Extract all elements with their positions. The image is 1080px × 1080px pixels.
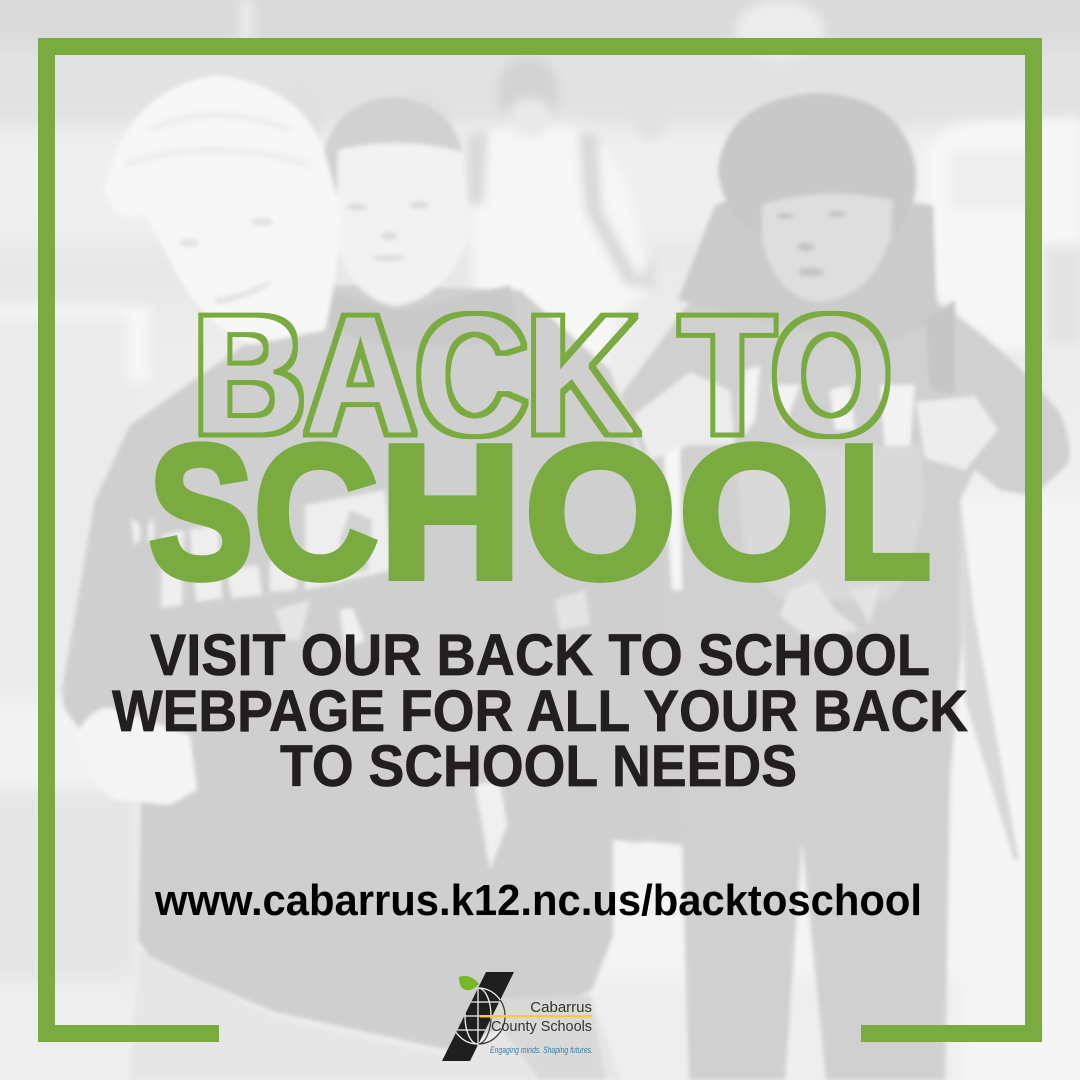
right boy hand lower	[613, 840, 682, 930]
heading: SCHOOL: O	[524, 406, 676, 618]
logo name: Cabarrus	[530, 999, 592, 1016]
icon: green leaf	[459, 976, 479, 990]
message text: WEBPAGE FOR ALL YOUR BACK	[112, 679, 968, 744]
logo: Cabarrus County Schools	[442, 972, 593, 1061]
right boy hair	[718, 93, 916, 235]
right boy hands	[634, 372, 735, 460]
message text: VISIT OUR BACK TO SCHOOL	[150, 623, 930, 688]
thumbs up hand	[76, 708, 197, 805]
right boy face	[762, 194, 893, 302]
left boy head	[104, 75, 342, 345]
trees row	[275, 80, 325, 150]
background walker	[468, 126, 654, 380]
heading: SCHOOL: L	[838, 406, 932, 618]
shirt print right	[740, 366, 915, 450]
tagline: Engaging minds. Shaping futures.	[490, 1045, 593, 1055]
backpack strap	[960, 500, 1019, 860]
yellow rule	[480, 1015, 592, 1018]
gap and pants	[130, 950, 620, 1080]
heading: SCHOOL: O	[678, 406, 830, 618]
heading: SCHOOL: C	[254, 406, 378, 618]
hoodie string	[475, 780, 507, 870]
message text: TO SCHOOL NEEDS	[280, 734, 797, 799]
gap white between boys	[664, 445, 682, 590]
heading: SCHOOL: S	[148, 406, 254, 618]
car on right side	[925, 118, 1080, 350]
logo name second line: County Schools	[491, 1018, 592, 1035]
icon: black slanted bar with globe	[442, 972, 514, 1061]
middle boy hair	[323, 97, 463, 227]
heading: SCHOOL: H	[379, 406, 522, 618]
right boy body	[613, 215, 1070, 1080]
middle boy face	[336, 143, 470, 306]
message text	[112, 623, 968, 799]
left boy shirt	[62, 285, 685, 1050]
right boy hood	[678, 190, 937, 345]
heading: BACK TO: BACK TO	[194, 278, 891, 472]
left boy shirt print	[131, 490, 392, 608]
website url: www.cabarrus.k12.nc.us/backtoschool	[154, 876, 922, 925]
